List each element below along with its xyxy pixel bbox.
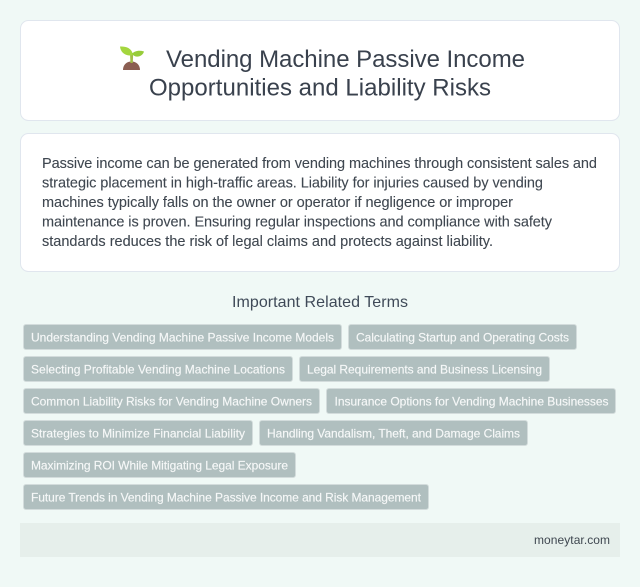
tag: Future Trends in Vending Machine Passive Income and Risk Management [31, 490, 422, 504]
title [149, 46, 525, 102]
footer: moneytar.com [534, 533, 610, 547]
title: Opportunities and Liability Risks [149, 74, 491, 102]
intro paragraph: strategic placement in high-traffic areas. Liability for injuries caused by vending [42, 176, 543, 192]
tag [24, 356, 292, 382]
tag [24, 324, 342, 350]
tag [24, 452, 296, 478]
tag [348, 324, 576, 350]
tag: Maximizing ROI While Mitigating Legal Exposure [31, 458, 288, 472]
tag [24, 388, 320, 414]
intro paragraph: machines typically falls on the owner or operator if negligence or improper [42, 195, 513, 211]
title: Vending Machine Passive Income [166, 46, 525, 73]
panel: intro text [20, 134, 620, 272]
intro paragraph: Passive income can be generated from vending machines through consistent sales and [42, 156, 597, 172]
intro paragraph [42, 156, 597, 250]
tag: Handling Vandalism, Theft, and Damage Claims [267, 426, 520, 440]
icon: sprout [120, 46, 144, 70]
tag [260, 420, 528, 446]
tag: Understanding Vending Machine Passive Income Models [31, 330, 334, 344]
tag: Common Liability Risks for Vending Machine Owners [31, 394, 312, 408]
tag [24, 420, 252, 446]
tag: Strategies to Minimize Financial Liability [31, 426, 245, 440]
tag: Insurance Options for Vending Machine Businesses [334, 394, 608, 408]
heading: important related terms: Important Related Terms [232, 294, 408, 311]
tag [326, 388, 616, 414]
tag [300, 356, 550, 382]
tag [24, 484, 428, 510]
panel: title card [20, 20, 620, 120]
tag: Selecting Profitable Vending Machine Locations [31, 362, 285, 376]
intro paragraph: maintenance is proven. Ensuring regular inspections and compliance with safety [42, 214, 553, 230]
tag list [24, 324, 616, 510]
tag: Calculating Startup and Operating Costs [356, 330, 569, 344]
intro paragraph: standards reduces the risk of legal claims and protects against liability. [42, 234, 493, 250]
tag: Legal Requirements and Business Licensing [307, 362, 542, 376]
footer [20, 523, 620, 557]
